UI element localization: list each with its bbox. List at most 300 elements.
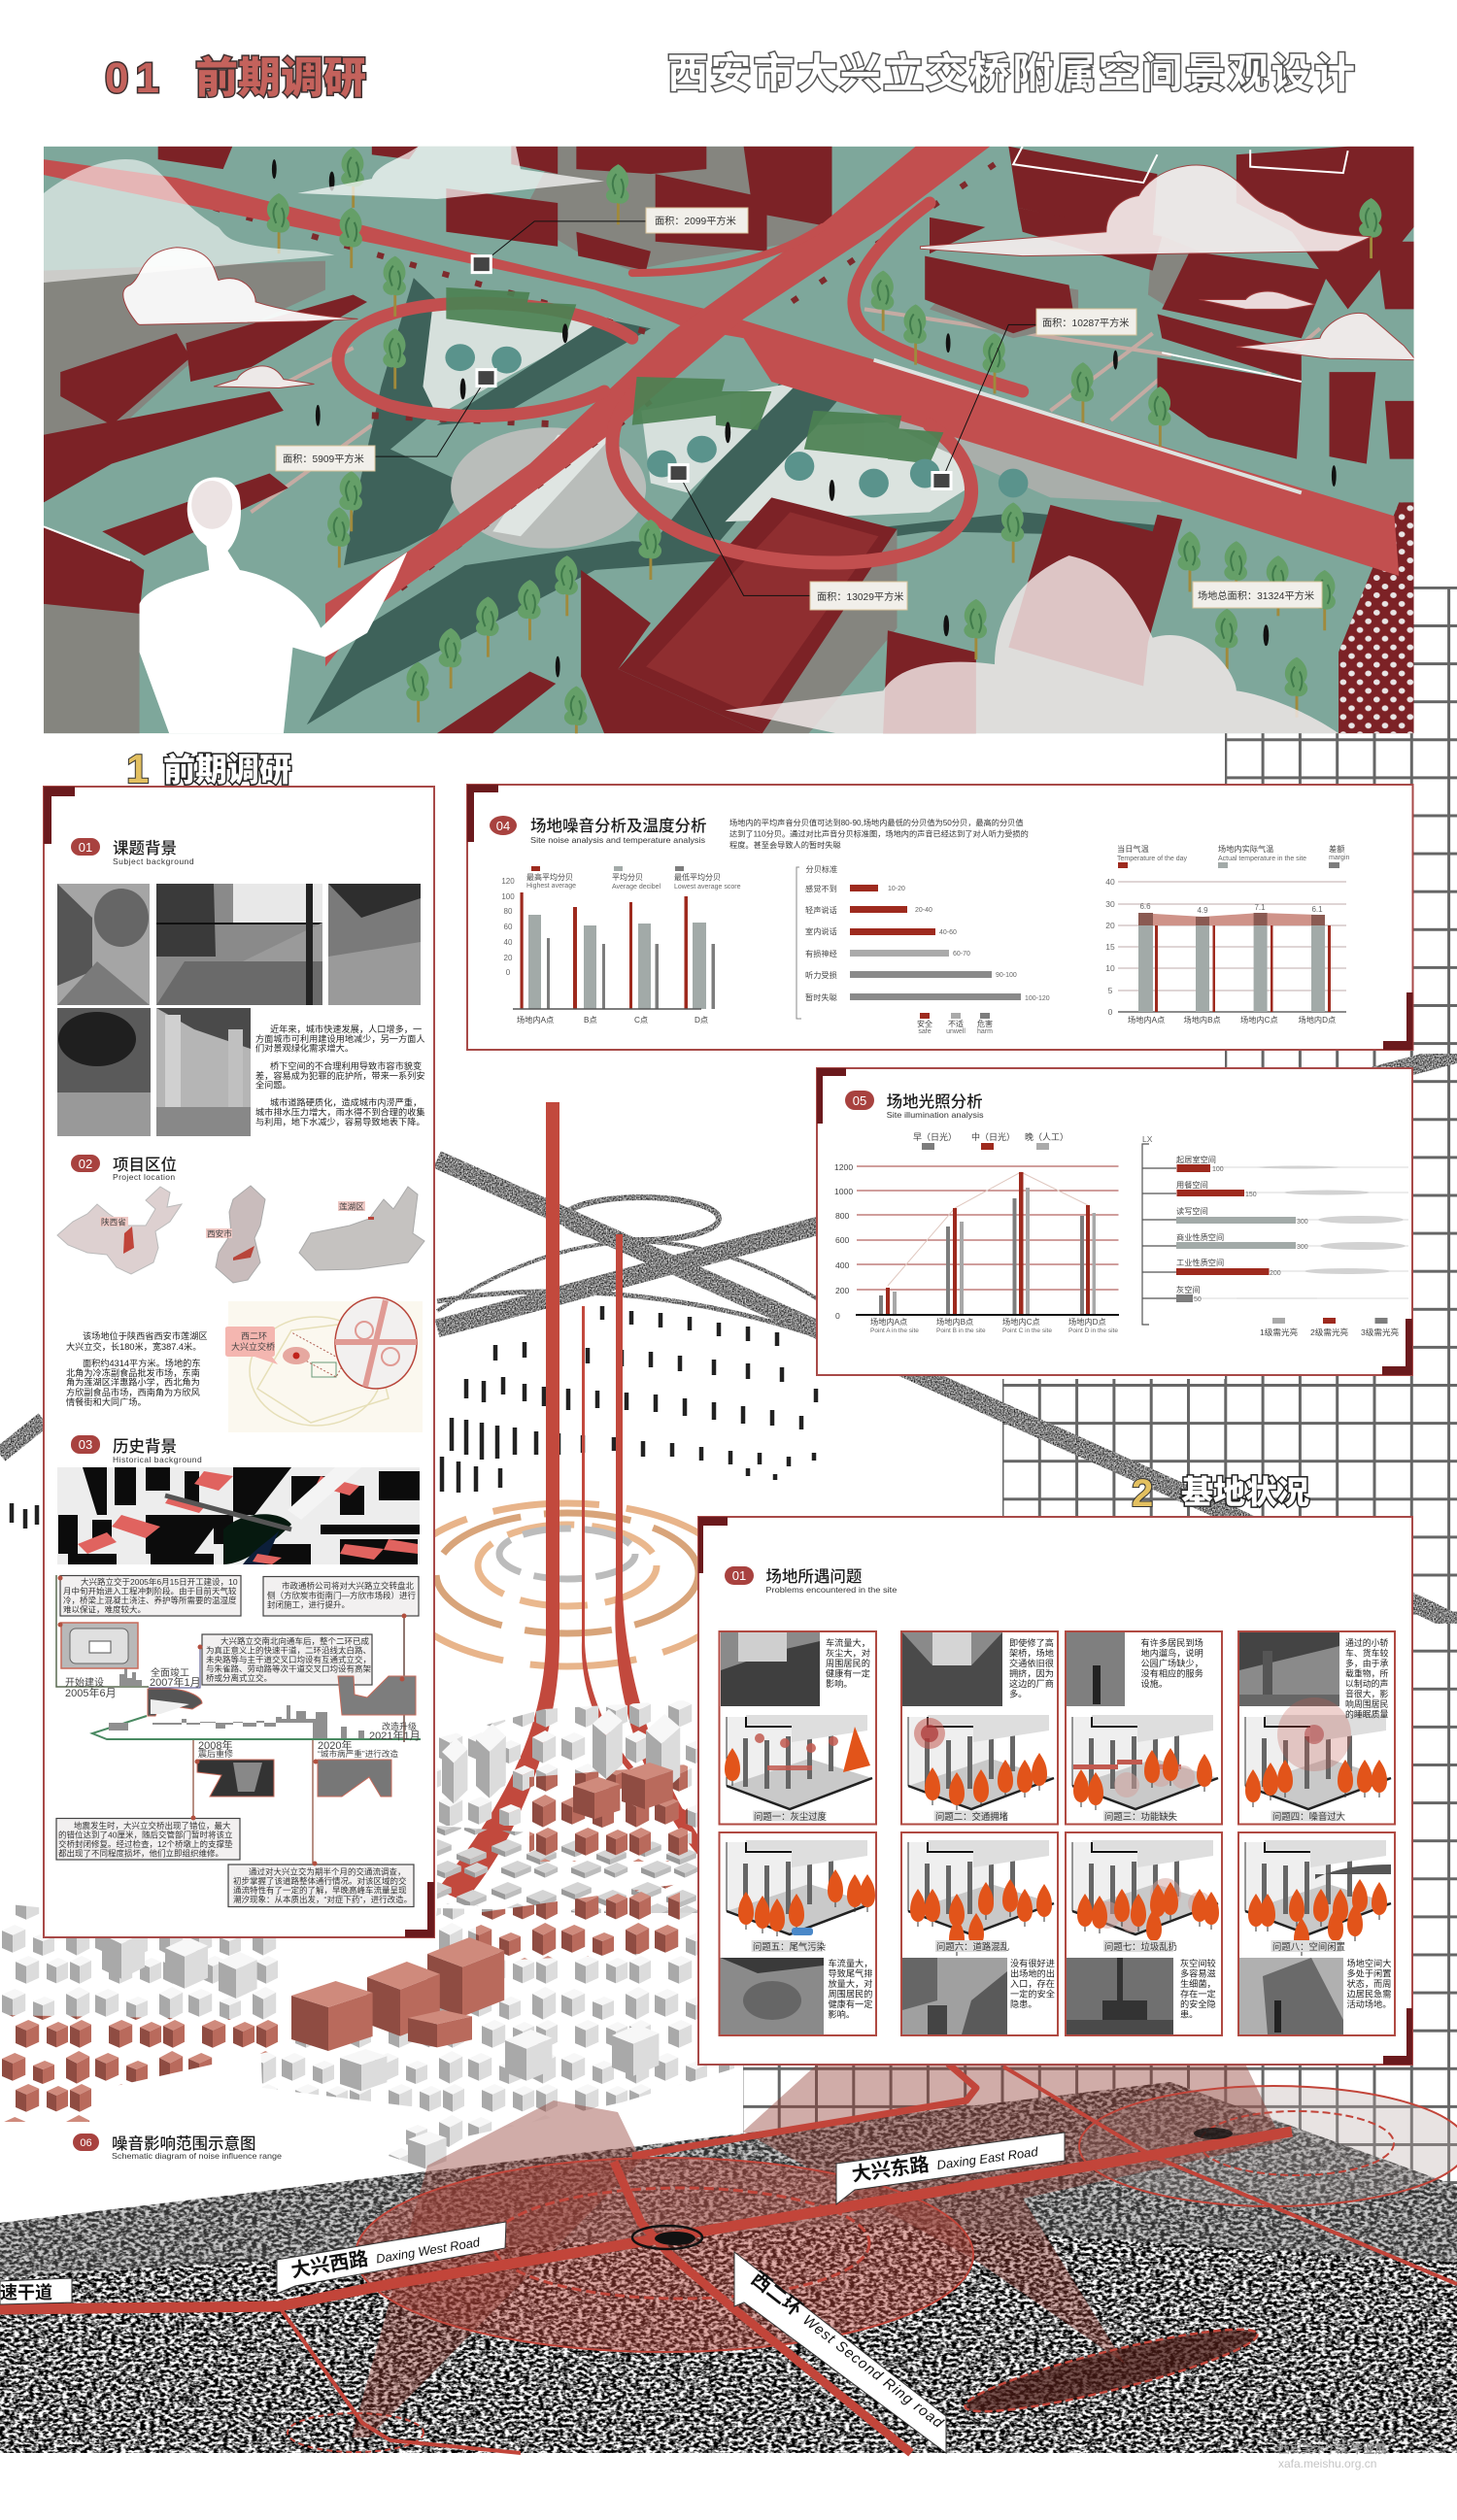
problem card: traffic: 问题二：交通拥堵: [935, 1811, 1008, 1822]
illumination legend: [913, 1131, 1068, 1150]
historical background heading: Historical background: [113, 1455, 202, 1464]
timeline box: 2020: 通流特性有了一定的了解，早晚高峰车流量呈现: [233, 1886, 407, 1896]
problem card: noise: 问题四：噪音过大: [1272, 1811, 1345, 1822]
historical background heading: 03: [79, 1437, 92, 1452]
subject background text: 城市道路硬质化，造成城市内涝严重，: [270, 1097, 422, 1107]
chart: temperature: 30: [1105, 899, 1115, 909]
timeline box: 2008: 的错位达到了40厘米，随后交管部门暂时将该立: [58, 1830, 233, 1839]
chart: daylight by point: 800: [835, 1211, 850, 1221]
chart: decibel standard: 40-60: [939, 929, 957, 936]
decibel standard legend: 危害: [977, 1019, 993, 1028]
noise description: 场地内的平均声音分贝值可达到80-90,场地内最低的分贝值为50分贝，最高的分贝值: [729, 818, 1024, 827]
timeline box: 2008: [56, 1818, 240, 1860]
noise description: 达到了110分贝。通过对比声音分贝标准图，场地内的声音已经达到了对人听力受损的: [729, 829, 1029, 839]
subject photos: [57, 884, 421, 1136]
chart: noise decibels: D点: [695, 1016, 708, 1025]
timeline dates: 改造升级: [382, 1721, 417, 1731]
noise projection cones: [352, 2064, 1282, 2437]
dark green shaded roads: [307, 278, 1171, 724]
map: Shaanxi with Xi'an: 西安市: [207, 1227, 232, 1239]
leader lines: [375, 221, 1036, 595]
chart: daylight by point: Point A in the site: [870, 1327, 919, 1334]
isometric site aerial: [57, 1467, 420, 1564]
chart: lux demand by space: 150: [1245, 1192, 1257, 1198]
illumination heading: 05: [853, 1093, 866, 1108]
project location text: 大兴立交，长180米，宽387.4米。: [66, 1341, 201, 1352]
chart: noise decibels: 100: [501, 892, 515, 901]
project location text: 情餐街和大同广场。: [66, 1396, 147, 1407]
problem card: litter: 灰空间较: [1180, 1958, 1216, 1968]
chart: decibel standard: 听力受损: [805, 970, 837, 980]
problem card: dust: 周围居民的: [826, 1658, 870, 1668]
timeline nodes: [58, 1575, 406, 1866]
road label: expressway: [0, 2278, 72, 2304]
background grid: [743, 587, 1457, 2272]
subject background heading: 01: [79, 840, 92, 855]
problem card: litter: 生细菌，: [1180, 1978, 1216, 1989]
subject background text: 方面城市可利用建设用地减少，另一方面人: [255, 1033, 425, 1044]
timeline box: 2021: 封闭施工，进行提升。: [267, 1600, 350, 1610]
area label: total site: 场地总面积：31324平方米: [1198, 589, 1314, 602]
chart: noise decibels: C点: [634, 1016, 648, 1025]
tree canopies: [446, 287, 943, 464]
title: section number and name: 01: [105, 54, 166, 102]
panel: site problems: [698, 1517, 1412, 2065]
chart: decibel standard: 90-100: [996, 972, 1017, 979]
problem card: noise: 以制动的声: [1345, 1678, 1388, 1689]
problem card: noise: 车、货车较: [1345, 1647, 1388, 1659]
chart: temperature: [1105, 877, 1346, 1025]
pale footpaths: [251, 309, 1320, 512]
illumination heading: 场地光照分析: [887, 1092, 983, 1111]
teal shrubs: [445, 344, 1028, 497]
timeline box: 2020: 通过对大兴立交为期半个月的交通流调查，: [249, 1866, 406, 1876]
area label: 10287: 面积：10287平方米: [1042, 317, 1129, 329]
problem card: disordered roads: 没有很好进: [1010, 1958, 1055, 1968]
project location heading: [71, 1155, 177, 1182]
problem card: missing functions: [1066, 1631, 1222, 1824]
problems heading: Problems encountered in the site: [765, 1585, 898, 1595]
subject background text: 桥下空间的不合理利用导致市容市貌变: [270, 1060, 422, 1071]
timeline dates: 2007年1月: [150, 1675, 201, 1689]
section marker 1: 1: [126, 746, 149, 791]
noise chart legend: [526, 866, 741, 890]
problem card: idle space: 问题八：空间闲置: [1272, 1941, 1345, 1952]
problem card: noise: 多，由于承: [1345, 1658, 1388, 1668]
lux legend: [1260, 1318, 1400, 1337]
chart: temperature: 20: [1105, 921, 1115, 930]
illumination heading: Site illumination analysis: [887, 1110, 984, 1120]
timeline box: 2021: 市政通桥公司将对大兴路立交转盘北: [282, 1581, 415, 1591]
problem card: exhaust: [719, 1832, 876, 2035]
subject background heading: 课题背景: [113, 839, 177, 857]
scattered pier marks: [12, 1306, 816, 1529]
noise chart legend: 平均分贝: [612, 872, 643, 882]
title: project name: 西安市大兴立交桥附属空间景观设计: [667, 50, 1355, 96]
title: section number and name: 前期调研: [195, 54, 366, 102]
problem card: disordered roads: 隐患。: [1010, 1999, 1037, 2009]
problem card: idle space: 活动场地。: [1346, 1999, 1391, 2009]
chart: daylight by point: [834, 1162, 1119, 1334]
project location text: 该场地位于陕西省西安市莲湖区: [83, 1330, 208, 1341]
problems heading: 场地所遇问题: [765, 1567, 862, 1586]
section marker 2: 2: [1132, 1472, 1153, 1515]
problem card: missing functions: 没有相应的服务: [1140, 1668, 1203, 1678]
problem card: disordered roads: [901, 1832, 1058, 2035]
subject background text: 与利用，地下水减少，容易导致地表下降。: [255, 1117, 425, 1126]
road label: Daxing East Road: 大兴东路 Daxing East Road: [850, 2137, 1039, 2186]
noise chart legend: Highest average: [526, 883, 576, 890]
timeline box: 2020: 初步掌握了该道路整体通行情况。对该区域的交: [233, 1876, 407, 1886]
chart: noise decibels: 20: [504, 954, 513, 962]
decibel standard legend: 安全: [917, 1019, 932, 1028]
timeline photos: [61, 1623, 416, 1797]
problem card: idle space: 状态，而周: [1346, 1978, 1391, 1989]
timeline box: 2007: 桥或分离式立交。: [206, 1673, 272, 1683]
area label: 2099: 面积：2099平方米: [655, 215, 736, 227]
map: Xi'an with Lianhu district: 莲湖区: [339, 1200, 364, 1212]
decibel standard legend: [917, 1013, 993, 1035]
chart: lux demand by space: 灰空间: [1176, 1285, 1201, 1294]
noise chart legend: 最低平均分贝: [674, 872, 721, 882]
chart: noise decibels: B点: [584, 1016, 597, 1025]
timeline box: 2021: [263, 1577, 419, 1616]
problems heading: 01: [732, 1568, 746, 1583]
timeline dates: 2021年1月: [369, 1729, 421, 1742]
chart: lux demand by space: [1142, 1134, 1408, 1325]
chart: daylight by point: Point C in the site: [1002, 1327, 1052, 1334]
site markers: [472, 256, 951, 488]
chart: temperature: 场地内C点: [1240, 1015, 1278, 1025]
problem card: disordered roads: 出场地的出: [1010, 1967, 1055, 1979]
chart: daylight by point: 场地内B点: [936, 1317, 973, 1327]
chart: daylight by point: 600: [835, 1235, 850, 1245]
problem card: idle space: 多处于闲置: [1346, 1967, 1391, 1979]
problem card: noise: 载重物，所: [1345, 1668, 1388, 1678]
site location map: 大兴立交桥: [231, 1341, 275, 1352]
timeline box: 2007: 大兴路立交南北向通车后，整个二环已成: [220, 1636, 370, 1646]
panel: site research: [44, 787, 434, 1937]
problem card: litter: 问题七：垃圾乱扔: [1104, 1941, 1177, 1952]
chart: daylight by point: 场地内A点: [870, 1317, 907, 1327]
timeline dates: “城市病严重”进行改造: [318, 1748, 398, 1759]
street trees: [267, 148, 1382, 747]
problem card: missing functions: 有许多居民到场: [1140, 1637, 1203, 1648]
lux legend: 3级需光亮: [1361, 1327, 1400, 1337]
white building outlines: [44, 147, 1348, 560]
timeline box: 2020: [228, 1865, 414, 1907]
section marker 2: [1132, 1472, 1309, 1515]
problem card: exhaust: 健康有一定: [828, 1999, 872, 2009]
temperature legend: [1117, 844, 1350, 868]
problem card: noise: 响周围居民: [1345, 1698, 1388, 1709]
road label: West Second Ring road: 西二环West Second Ring road: [747, 2268, 949, 2433]
timeline dates: 2005年6月: [65, 1686, 117, 1699]
watermark: [1278, 2441, 1386, 2470]
chart: daylight by point: 0: [835, 1311, 840, 1321]
subject background text: 全问题。: [255, 1080, 291, 1090]
timeline dates: 2020年: [318, 1738, 352, 1752]
grey building masses: [44, 147, 1200, 733]
problem card: noise: 音很大，影: [1345, 1688, 1388, 1699]
project location text: 面积约4314平方米。场地的东: [83, 1358, 201, 1368]
chart: lux demand by space: 50: [1194, 1296, 1202, 1303]
site location map: 西二环: [241, 1331, 267, 1341]
heading: noise influence diagram: 06: [80, 2137, 92, 2149]
problem card: missing functions: 设施。: [1140, 1678, 1168, 1689]
concentric noise rings: [397, 1503, 737, 1666]
bridge piers: [213, 161, 997, 608]
problem card: dust: 问题一：灰尘过度: [754, 1811, 827, 1822]
problem card: missing functions: 地内遛鸟，说明: [1140, 1647, 1203, 1659]
problem card: disordered roads: 问题六：道路混乱: [936, 1941, 1009, 1952]
chart: lux demand by space: 用餐空间: [1176, 1180, 1208, 1190]
problem card: dust: 灰尘大，对: [826, 1647, 870, 1659]
problem card: noise: [1238, 1631, 1395, 1824]
problem card: disordered roads: 一定的安全: [1010, 1989, 1055, 1999]
problem card: litter: 多容易滋: [1180, 1967, 1216, 1979]
lux legend: 2级需光亮: [1310, 1327, 1349, 1337]
problem card: exhaust: 车流量大，: [828, 1958, 872, 1968]
chart: noise decibels: 0: [506, 968, 511, 977]
chart: temperature: 4.9: [1197, 906, 1208, 915]
timeline box: 2005: 大兴路立交于2005年6月15日开工建设，10: [81, 1577, 238, 1587]
red elevated road towers: [437, 1102, 699, 1901]
project location heading: 02: [79, 1157, 92, 1171]
decibel standard legend: 不适: [948, 1019, 964, 1028]
chart: noise decibels: 40: [504, 938, 513, 947]
project location text: 北角为冷冻副食品批发市场，东南: [66, 1367, 200, 1378]
chart: decibel standard: 100-120: [1025, 995, 1050, 1002]
timeline box: 2007: [202, 1634, 372, 1685]
heading: noise influence diagram: 噪音影响范围示意图: [112, 2134, 256, 2153]
area label: 10287: [1036, 309, 1136, 335]
chart: daylight by point: Point B in the site: [936, 1327, 986, 1334]
problem card: traffic: 拥挤，因为: [1009, 1668, 1054, 1678]
timeline box: 2005: 月中旬开始进入工程冲刺阶段。由于目前天气较: [63, 1587, 237, 1596]
aerial overpass strips: [0, 1054, 1457, 1624]
temperature legend: 当日气温: [1117, 844, 1149, 854]
chart: noise decibels: 80: [504, 907, 513, 916]
chart: temperature: 场地内D点: [1298, 1015, 1336, 1025]
facade with dot pattern: [1338, 502, 1414, 733]
chart: daylight by point: 1200: [834, 1162, 853, 1172]
problem card: exhaust: 周围居民的: [828, 1989, 872, 1999]
noise heading: 场地噪音分析及温度分析: [530, 816, 707, 835]
problem card: dust: 车流量大，: [826, 1637, 870, 1648]
dark red buildings: [44, 147, 1414, 733]
noise heading: 04: [496, 819, 510, 833]
area label: 13029: 面积：13029平方米: [817, 590, 903, 603]
area label: 2099: [646, 208, 748, 233]
decibel standard legend: harm: [977, 1028, 993, 1035]
timeline dates: 全面竣工: [151, 1666, 189, 1679]
timeline box: 2005: [60, 1575, 241, 1616]
timeline dates: 震后重修: [198, 1748, 233, 1759]
chart: decibel standard: 分贝标准: [806, 864, 837, 874]
section marker 2: 基地状况: [1181, 1474, 1309, 1510]
timeline skyline: [109, 1664, 364, 1738]
problem card: exhaust: 导致尾气排: [828, 1967, 872, 1979]
chart: daylight by point: 1000: [834, 1187, 853, 1196]
problem card: litter: 患。: [1180, 2008, 1198, 2020]
chart: daylight by point: 场地内C点: [1002, 1317, 1040, 1327]
chart: decibel standard: 室内说话: [805, 926, 837, 936]
secondary noise source marker: [1194, 2128, 1233, 2139]
chart: lux demand by space: 起居室空间: [1176, 1155, 1216, 1164]
chart: noise decibels: 场地内A点: [517, 1015, 554, 1025]
road label: Daxing East Road: [836, 2133, 1065, 2204]
chart: noise decibels: 60: [504, 923, 513, 931]
timeline box: 2007: 为真正意义上的快速干道，二环沿线太白路、: [206, 1645, 371, 1655]
interchange noise source marker: [632, 2226, 702, 2249]
watermark: xafa.meishu.org.cn: [1278, 2457, 1376, 2470]
chart: temperature: 10: [1105, 963, 1115, 973]
site location map: [225, 1297, 423, 1432]
problem card: litter: 存在一定: [1180, 1989, 1216, 1999]
map: Shaanxi with Xi'an: [206, 1186, 265, 1283]
illumination heading: [845, 1091, 984, 1120]
temperature legend: 差额: [1329, 844, 1344, 854]
chart: temperature: 40: [1105, 877, 1115, 887]
problem card: missing functions: 公园广场缺少，: [1140, 1658, 1203, 1668]
chart: temperature: 5: [1108, 986, 1113, 995]
problems heading: [725, 1566, 898, 1595]
problem card: traffic: 即使修了高: [1009, 1637, 1054, 1648]
subject background text: 城市排水压力增大，雨水得不到合理的收集: [255, 1107, 425, 1117]
noise chart legend: Lowest average score: [674, 884, 741, 890]
problem card: litter: [1066, 1832, 1222, 2035]
map: China with Shaanxi: [57, 1187, 182, 1274]
timeline box: 2008: 都出现了不同程度损坏，他们立即组织维修。: [58, 1849, 223, 1859]
chart: lux demand by space: 工业性质空间: [1176, 1258, 1224, 1267]
problem card: traffic: 架桥，场地: [1009, 1647, 1054, 1659]
chart: temperature: 场地内A点: [1128, 1015, 1165, 1025]
subject background text: 们对景观绿化需求增大。: [255, 1043, 354, 1053]
timeline box: 2021: 侧（方欣炭市街南门—方欣市场段）进行: [267, 1591, 417, 1600]
problem card: missing functions: 问题三：功能缺失: [1104, 1811, 1178, 1822]
area label: 5909: [276, 446, 375, 471]
right noise circle beyond the site: [1079, 2086, 1457, 2206]
problem card: exhaust: 问题五：尾气污染: [753, 1941, 827, 1952]
noise heading: [490, 816, 707, 845]
problem card: traffic: [901, 1631, 1058, 1824]
illumination legend: 早（日光）: [913, 1131, 957, 1142]
subject background text: 近年来，城市快速发展，人口增多，一: [270, 1024, 422, 1034]
clouds: [44, 147, 1416, 733]
problem card: traffic: 多。: [1009, 1688, 1027, 1699]
chart: lux demand by space: 100: [1212, 1166, 1224, 1173]
subject background heading: [71, 838, 194, 866]
heading: noise influence diagram: [73, 2134, 282, 2161]
timeline box: 2005: 难以保证，难度较大。: [63, 1604, 146, 1614]
3D city model: [0, 1699, 734, 2168]
noise influence overlay: [0, 2082, 1457, 2426]
problem card: disordered roads: 入口，存在: [1010, 1978, 1055, 1989]
map: China with Shaanxi: 陕西省: [101, 1216, 126, 1227]
area label: total site: [1193, 582, 1322, 608]
chart: decibel standard: 10-20: [888, 886, 905, 892]
subject background heading: Subject background: [113, 857, 194, 866]
chart: temperature: 15: [1105, 942, 1115, 952]
area label: 5909: 面积：5909平方米: [283, 453, 364, 465]
timeline box: 2008: 地震发生时，大兴立交桥出现了错位，最大: [74, 1821, 231, 1831]
man silhouette: [140, 477, 407, 733]
timeline box: 2005: 冷，桥梁上混凝土浇注、养护等所需要的温湿度: [63, 1596, 237, 1605]
pedestrians: [272, 159, 1337, 677]
red road network: [0, 2064, 1457, 2453]
problem card: exhaust: 放量大，对: [828, 1978, 872, 1989]
temperature legend: 场地内实际气温: [1218, 844, 1273, 854]
noise description: 程度。甚至会导致人的暂时失聪: [729, 840, 841, 850]
chart: decibel standard: [796, 864, 1050, 1019]
timeline dates: 2008年: [198, 1738, 232, 1752]
timeline box: 2020: 潮汐现象：从本质出发，“对症下药”，进行改造。: [233, 1895, 412, 1904]
section marker 1: 前期调研: [163, 752, 291, 788]
chart: temperature: 场地内B点: [1183, 1015, 1221, 1025]
chart: lux demand by space: 商业性质空间: [1176, 1232, 1224, 1242]
chart: lux demand by space: LX: [1142, 1134, 1153, 1144]
timeline dates: 开始建设: [65, 1676, 104, 1689]
map: Xi'an with Lianhu district: [299, 1187, 424, 1270]
lux legend: 1级需光亮: [1260, 1327, 1299, 1337]
problem card: noise: 的睡眠质量: [1345, 1709, 1388, 1719]
road label: Daxing West Road: 大兴西路 Daxing West Road: [289, 2229, 482, 2282]
timeline box: 2007: 未央路等与主干道交叉口均设有互通式立交，: [206, 1655, 371, 1664]
temperature legend: margin: [1329, 855, 1350, 861]
problem card: idle space: [1238, 1832, 1395, 2035]
problem card: traffic: 交通依旧很: [1009, 1658, 1054, 1668]
history timeline lines: [56, 1575, 421, 1864]
problem card: traffic: 这边的厂商: [1009, 1678, 1054, 1689]
chart: temperature: 7.1: [1254, 903, 1266, 912]
plazas: [423, 309, 1162, 549]
noise influence satellite base: [0, 2082, 1457, 2453]
chart: decibel standard: 有损神经: [805, 949, 837, 958]
historical background heading: [71, 1435, 202, 1464]
problem card: litter: 的安全隐: [1180, 1999, 1216, 2009]
project location text: 方欣副食品市场，西南角为方欣风: [66, 1387, 200, 1397]
road label: expressway: 速干道: [0, 2282, 52, 2302]
problem card: idle space: 边居民急需: [1346, 1989, 1391, 1999]
area label: 13029: [810, 582, 907, 610]
panel: illumination: [817, 1068, 1412, 1375]
historical background heading: 历史背景: [113, 1437, 177, 1456]
chart: lux demand by space: 300: [1297, 1219, 1308, 1226]
panel: noise and temperature: [467, 785, 1412, 1050]
heading: noise influence diagram: Schematic diagram of noise influence range: [112, 2151, 282, 2161]
chart: lux demand by space: 300: [1297, 1244, 1308, 1251]
illumination legend: 晚（人工）: [1025, 1132, 1068, 1142]
problem card: dust: [719, 1631, 876, 1824]
chart: daylight by point: Point D in the site: [1068, 1327, 1118, 1334]
chart: temperature: 6.6: [1139, 902, 1151, 911]
chart: decibel standard: 20-40: [915, 907, 932, 914]
decibel standard legend: unwell: [946, 1028, 966, 1035]
watermark: 西安美术学院 毕业展: [1278, 2441, 1386, 2456]
noise chart legend: 最高平均分贝: [526, 872, 573, 882]
problem card: idle space: 场地空间大: [1346, 1958, 1391, 1968]
chart: decibel standard: 轻声说话: [805, 905, 837, 915]
hero illustration: elevated interchange: [44, 147, 1416, 747]
noise chart legend: Average decibel: [612, 884, 661, 890]
decibel standard legend: safe: [918, 1028, 932, 1035]
project location text: 角为莲湖区洋惠路小学，西北角为: [66, 1377, 200, 1387]
chart: decibel standard: 60-70: [953, 951, 970, 958]
chart: noise decibels: [501, 877, 715, 1025]
timeline box: 2007: 与朱雀路、劳动路等次干道交叉口均设有高架: [206, 1664, 372, 1674]
chart: decibel standard: 暂时失聪: [805, 992, 837, 1002]
